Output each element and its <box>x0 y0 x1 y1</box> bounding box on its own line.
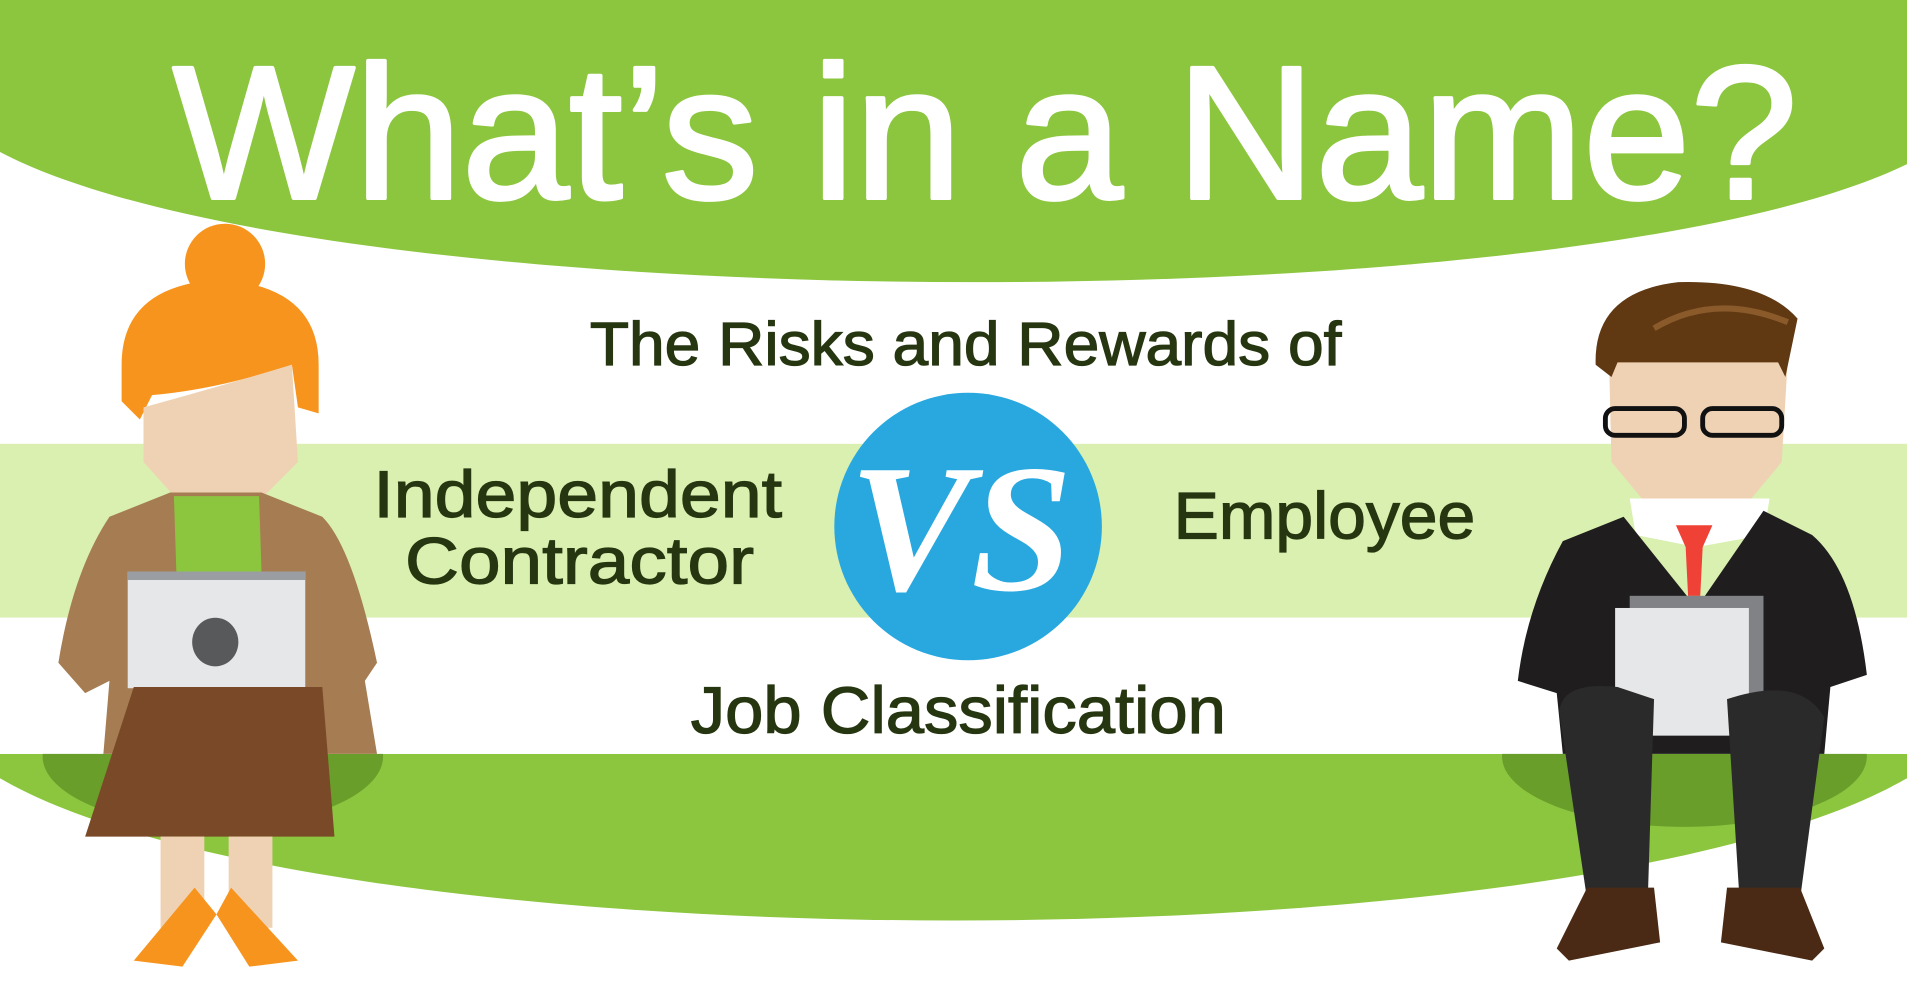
top <box>174 496 261 571</box>
shoes <box>134 888 216 967</box>
label: independent contractor: Contractor <box>405 525 754 598</box>
face <box>1609 359 1788 499</box>
jacket <box>58 492 377 754</box>
VS badge <box>834 393 1102 660</box>
tie <box>1676 525 1712 596</box>
title: What’s in a Name? <box>173 27 1798 239</box>
glasses <box>1605 409 1782 435</box>
hair <box>185 224 265 304</box>
subtitle: The Risks and Rewards of <box>590 310 1342 378</box>
tablet <box>1630 596 1763 730</box>
label: independent contractor: Independent <box>373 458 782 531</box>
title banner <box>0 0 1907 282</box>
shoes <box>1557 888 1660 961</box>
skirt <box>85 687 334 837</box>
legs <box>161 837 204 928</box>
VS badge: VS <box>849 428 1072 630</box>
collar <box>1630 499 1770 547</box>
man character <box>1518 282 1867 961</box>
face <box>144 365 298 499</box>
woman character <box>58 224 377 967</box>
suit <box>1518 511 1867 754</box>
label: job classification: Job Classification <box>691 674 1226 747</box>
hair <box>1596 282 1798 377</box>
laptop <box>128 571 305 688</box>
legs <box>1559 686 1654 900</box>
label: employee: Employee <box>1174 480 1475 553</box>
label: independent contractor <box>373 458 782 598</box>
